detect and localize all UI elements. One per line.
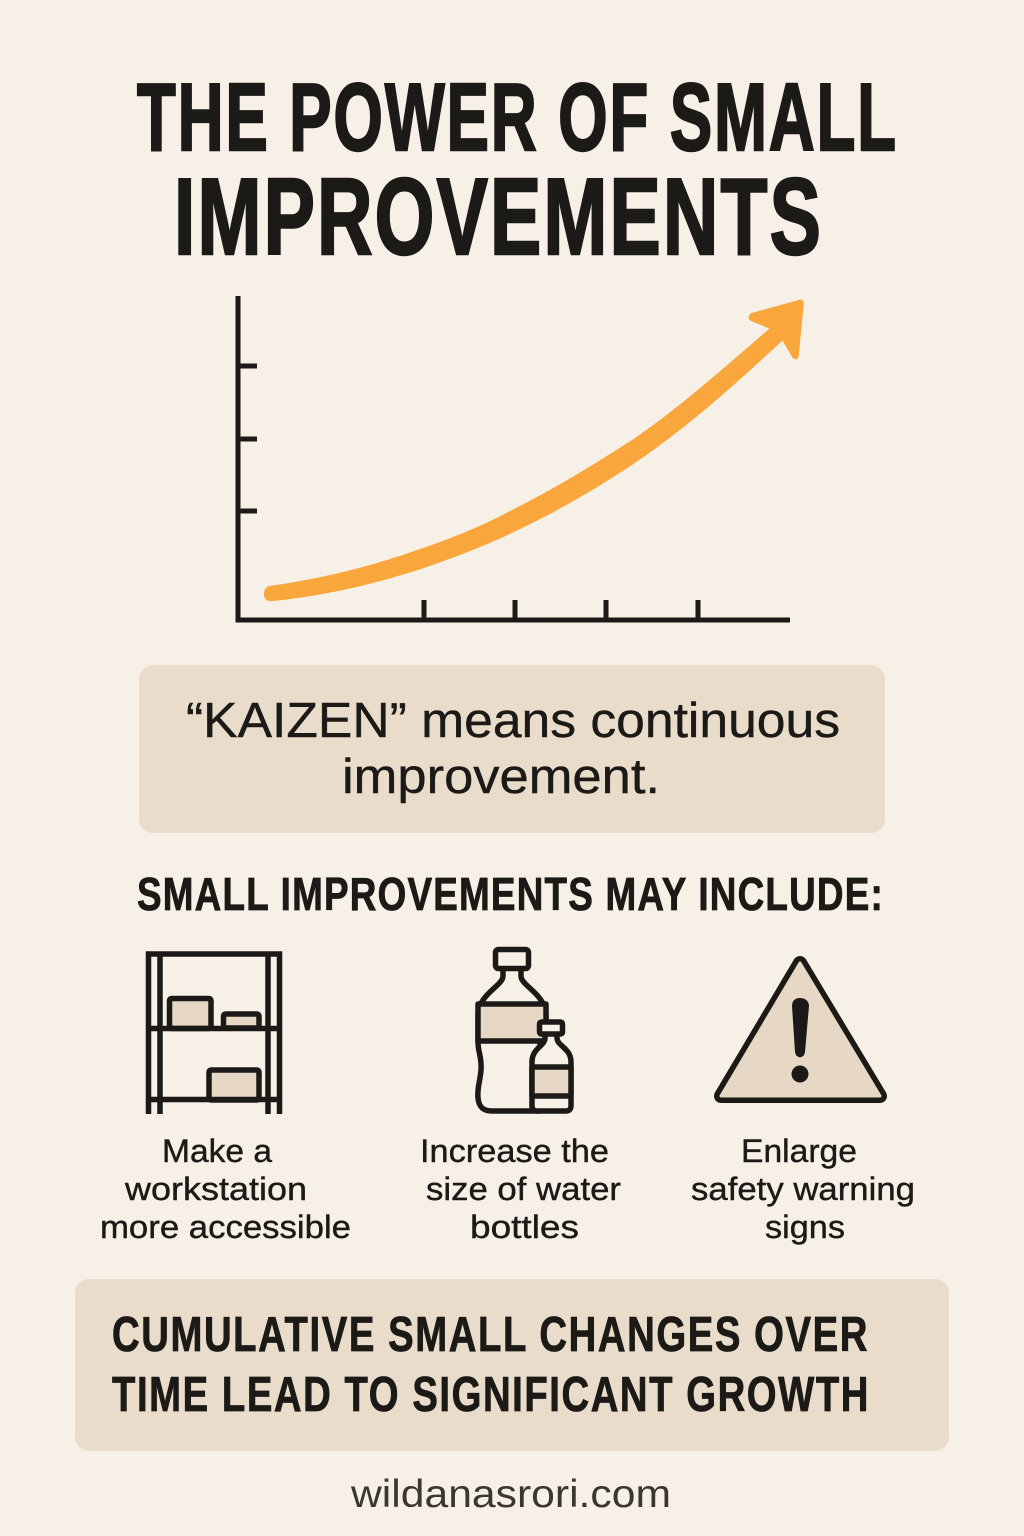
growth chart: [238, 296, 803, 620]
label: size of water: [426, 1171, 621, 1207]
icon: shelf: [148, 954, 280, 1114]
kaizen definition panel: [139, 665, 885, 833]
label: Make a: [162, 1133, 273, 1169]
title: [137, 64, 898, 278]
label: workstation: [124, 1171, 307, 1207]
kaizen definition panel: “KAIZEN” means continuous: [186, 694, 840, 748]
item: safety signs: [691, 963, 915, 1245]
label: safety warning: [691, 1171, 915, 1207]
icon: bottles: [478, 950, 571, 1111]
item: workstation: [100, 954, 351, 1245]
label: [420, 1133, 621, 1245]
chart axes and ticks: [238, 296, 790, 620]
kaizen definition panel: improvement.: [342, 750, 660, 804]
label: Increase the: [420, 1133, 609, 1169]
icon: warning triangle: [721, 963, 880, 1096]
orange growth arrow: [264, 300, 803, 601]
label: [691, 1133, 915, 1245]
label: [100, 1133, 351, 1245]
label: Enlarge: [741, 1133, 857, 1169]
label: more accessible: [100, 1209, 351, 1245]
label: bottles: [470, 1209, 579, 1245]
item: water bottles: [420, 950, 621, 1245]
conclusion panel: [75, 1279, 949, 1451]
label: signs: [765, 1209, 845, 1245]
footer website: wildanasrori.com: [350, 1473, 671, 1516]
